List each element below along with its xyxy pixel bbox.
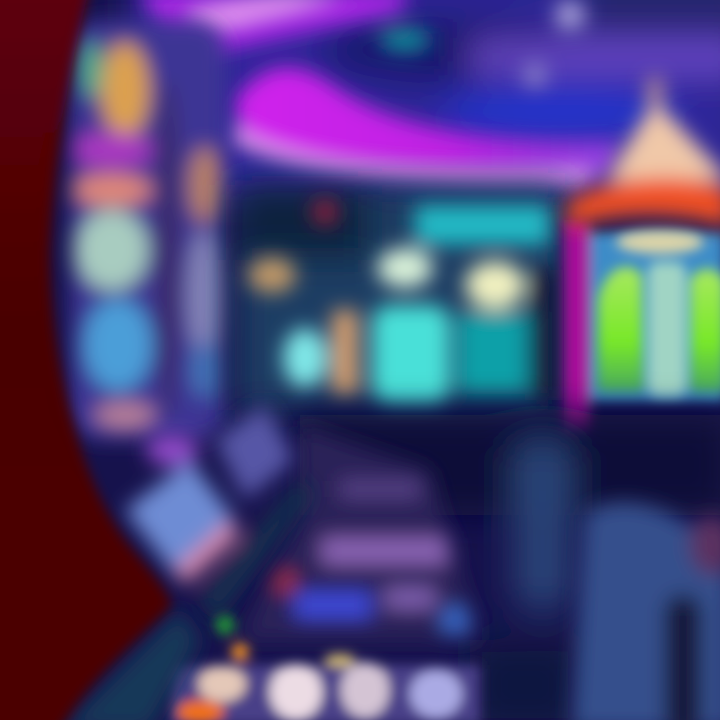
lower left dark blue floor edge (60, 610, 200, 720)
centre machines: dark backdrop (235, 185, 565, 410)
left machine column (70, 20, 225, 440)
green panels (598, 230, 720, 397)
left foreground dark red shape (0, 0, 172, 720)
carpet floor stripes (240, 425, 480, 640)
right machine: arch and screens (564, 76, 720, 435)
slot row: lower left screens (125, 405, 312, 620)
foreground seat: blue (572, 502, 720, 720)
dark seating area (300, 415, 720, 720)
ceiling: lower magenta arc (228, 67, 620, 188)
ceiling: dark blue and purple bands (130, 0, 720, 200)
centre machines: teal screens and lights (248, 199, 556, 405)
ceiling: upper magenta arc (140, 0, 585, 87)
bottom floor tiles (170, 615, 480, 720)
arch pillar (564, 220, 720, 435)
arch top (565, 76, 720, 228)
